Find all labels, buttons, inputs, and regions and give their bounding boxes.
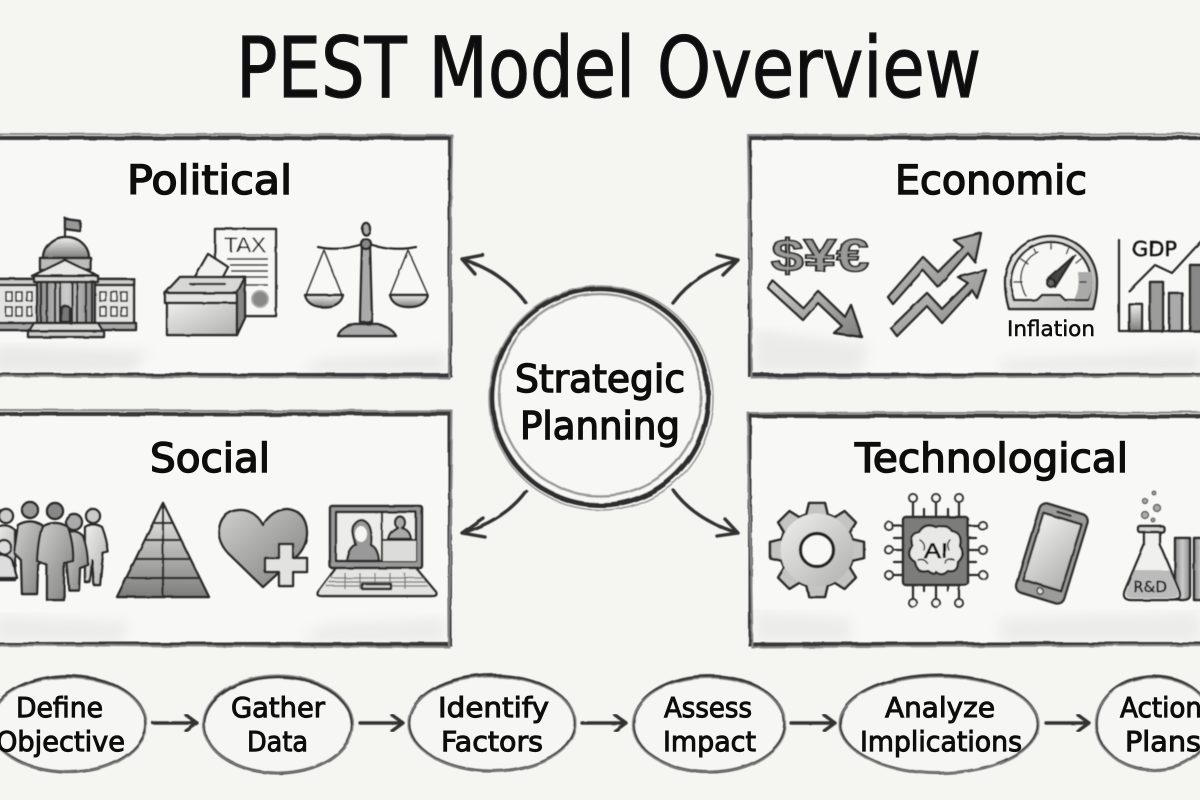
center circle: strategic planning: Planning [520,404,680,448]
label: gather data [231,691,325,758]
label: define objective: Define [16,691,103,724]
arrow: step 3 to 4 [582,715,626,731]
panel: technological [748,412,1200,647]
panel: political [0,134,452,378]
icon: currency symbols: $¥€ [771,230,869,281]
label: assess impact: Impact [663,725,756,758]
GDP label: GDP [1132,237,1177,261]
heading: social: Social [150,436,270,482]
icon: video call laptop [318,506,436,596]
icon: smartphone [1014,502,1089,605]
label: action plans: Plans [1125,725,1200,758]
label: identify factors [438,691,549,758]
icon: scales of justice [305,223,428,336]
step: define objective [0,676,147,772]
label: define objective [0,691,125,758]
label: analyze implications: Implications [860,725,1022,758]
arrow: step 2 to 3 [360,715,403,731]
icon: heart with cross [219,509,307,587]
center label: Strategic [515,357,685,401]
icon: pyramid [117,503,209,597]
icon: gear [770,503,864,597]
step: action plans [1095,676,1200,770]
icon: tax document [215,229,276,316]
arrow: to social [462,491,526,537]
process flow [0,675,1200,773]
heading: technological: Technological [854,436,1128,482]
step: gather data [203,675,353,773]
icon: R&D flask and tubes [1124,491,1200,600]
heading: political: Political [127,158,292,204]
icon: group of people [0,502,108,600]
AI label: AI [924,540,948,563]
icon: GDP chart [1119,237,1200,331]
inflation label: Inflation [1007,317,1095,341]
label: action plans [1120,691,1200,758]
R&D label: R&D [1133,578,1167,596]
step: identify factors [408,675,576,771]
arrow: to technological [673,490,738,536]
label: assess impact: Assess [664,691,752,724]
icon: ballot box [165,254,245,335]
icon: inflation gauge [1005,236,1097,309]
icon: AI chip [885,494,987,607]
label: identify factors: Identify [438,691,549,724]
arrow: step 5 to 6 [1046,715,1089,731]
label: identify factors: Factors [441,725,543,758]
label: analyze implications [860,691,1022,758]
icon: government building [0,218,136,337]
arrow: step 1 to 2 [153,715,197,731]
center circle: strategic planning [489,286,713,510]
label: assess impact [663,691,756,758]
icon: falling arrow [768,281,862,337]
heading: economic: Economic [895,158,1087,204]
icon: rising arrows [888,233,986,336]
tax label: TAX [224,234,266,257]
panel: economic [748,134,1200,378]
title: PEST Model Overview [236,19,981,117]
step: assess impact [632,676,786,772]
arrow: to political [462,255,526,303]
arrow: to economic [673,255,738,303]
arrow: step 4 to 5 [791,715,835,731]
panel: social [0,410,452,647]
label: gather data: Gather [231,691,325,724]
step: analyze implications [839,675,1039,773]
label: analyze implications: Analyze [885,691,995,724]
label: gather data: Data [247,725,308,758]
